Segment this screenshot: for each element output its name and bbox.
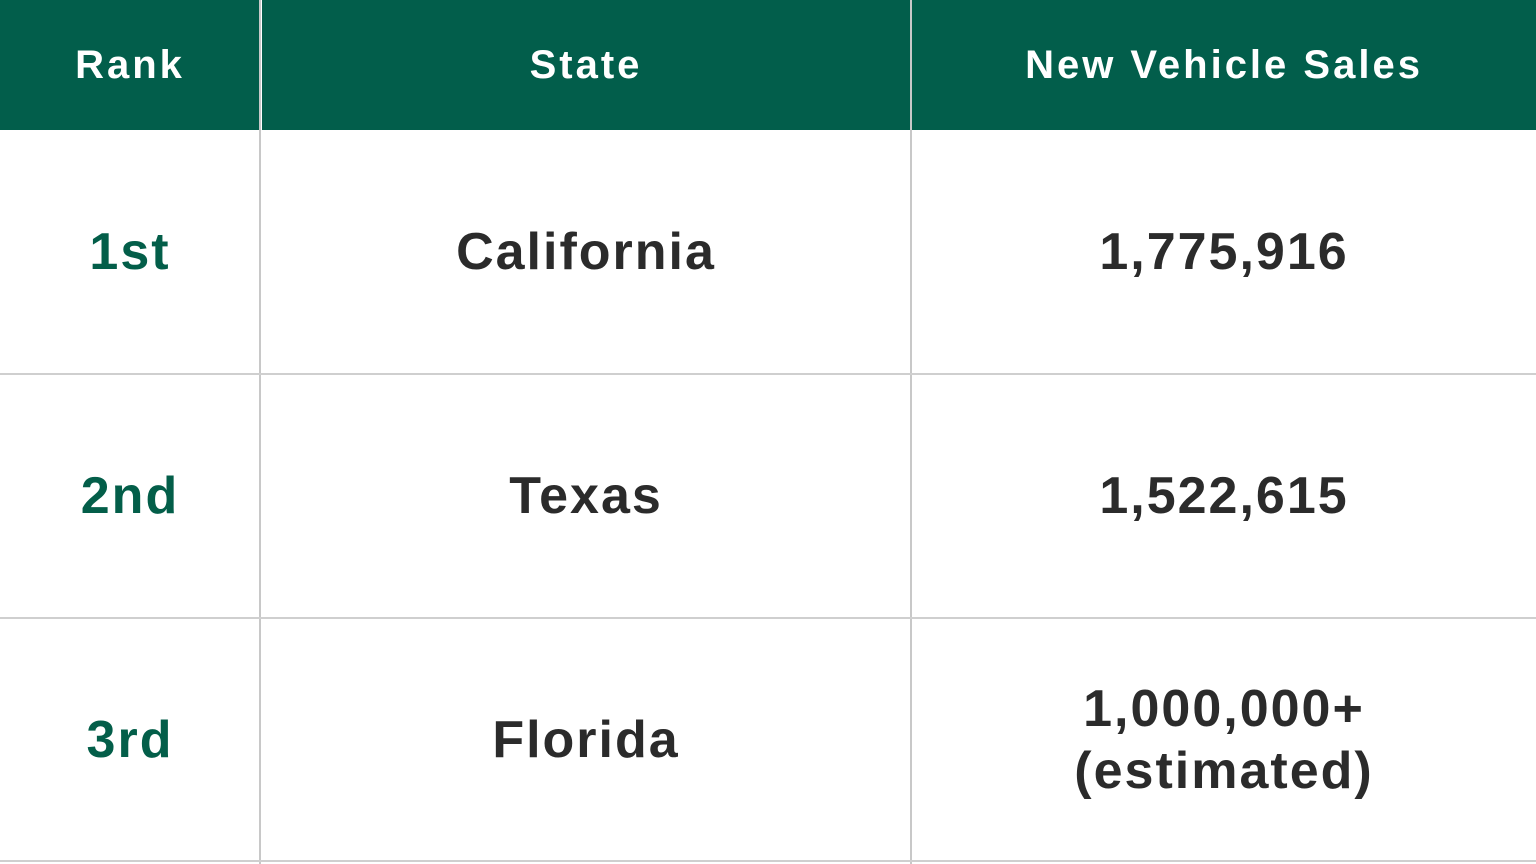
header: State: State: [530, 42, 642, 86]
header: New Vehicle Sales: [912, 0, 1536, 130]
rank 3rd: 3rd: [87, 711, 173, 769]
sales 1,522,615: 1,522,615: [1099, 467, 1349, 525]
row 2: [81, 467, 1349, 525]
rank 2nd: 2nd: [81, 467, 179, 525]
rank 1st: 1st: [89, 223, 171, 281]
header: State: [262, 0, 910, 130]
state Texas: Texas: [509, 467, 663, 525]
sales 1,000,000+ estimated: [1074, 680, 1374, 800]
state Florida: Florida: [492, 711, 680, 769]
sales 1,000,000+ estimated: (estimated): [1074, 742, 1374, 800]
row 3: [87, 680, 1374, 800]
sales 1,775,916: 1,775,916: [1099, 223, 1349, 281]
header: Rank: Rank: [75, 42, 185, 86]
header: New Vehicle Sales: New Vehicle Sales: [1025, 42, 1423, 86]
sales 1,000,000+ estimated: 1,000,000+: [1083, 680, 1365, 738]
row 1: [89, 223, 1349, 281]
header: Rank: [0, 0, 260, 130]
state California: California: [456, 223, 716, 281]
table header: [0, 0, 1536, 130]
